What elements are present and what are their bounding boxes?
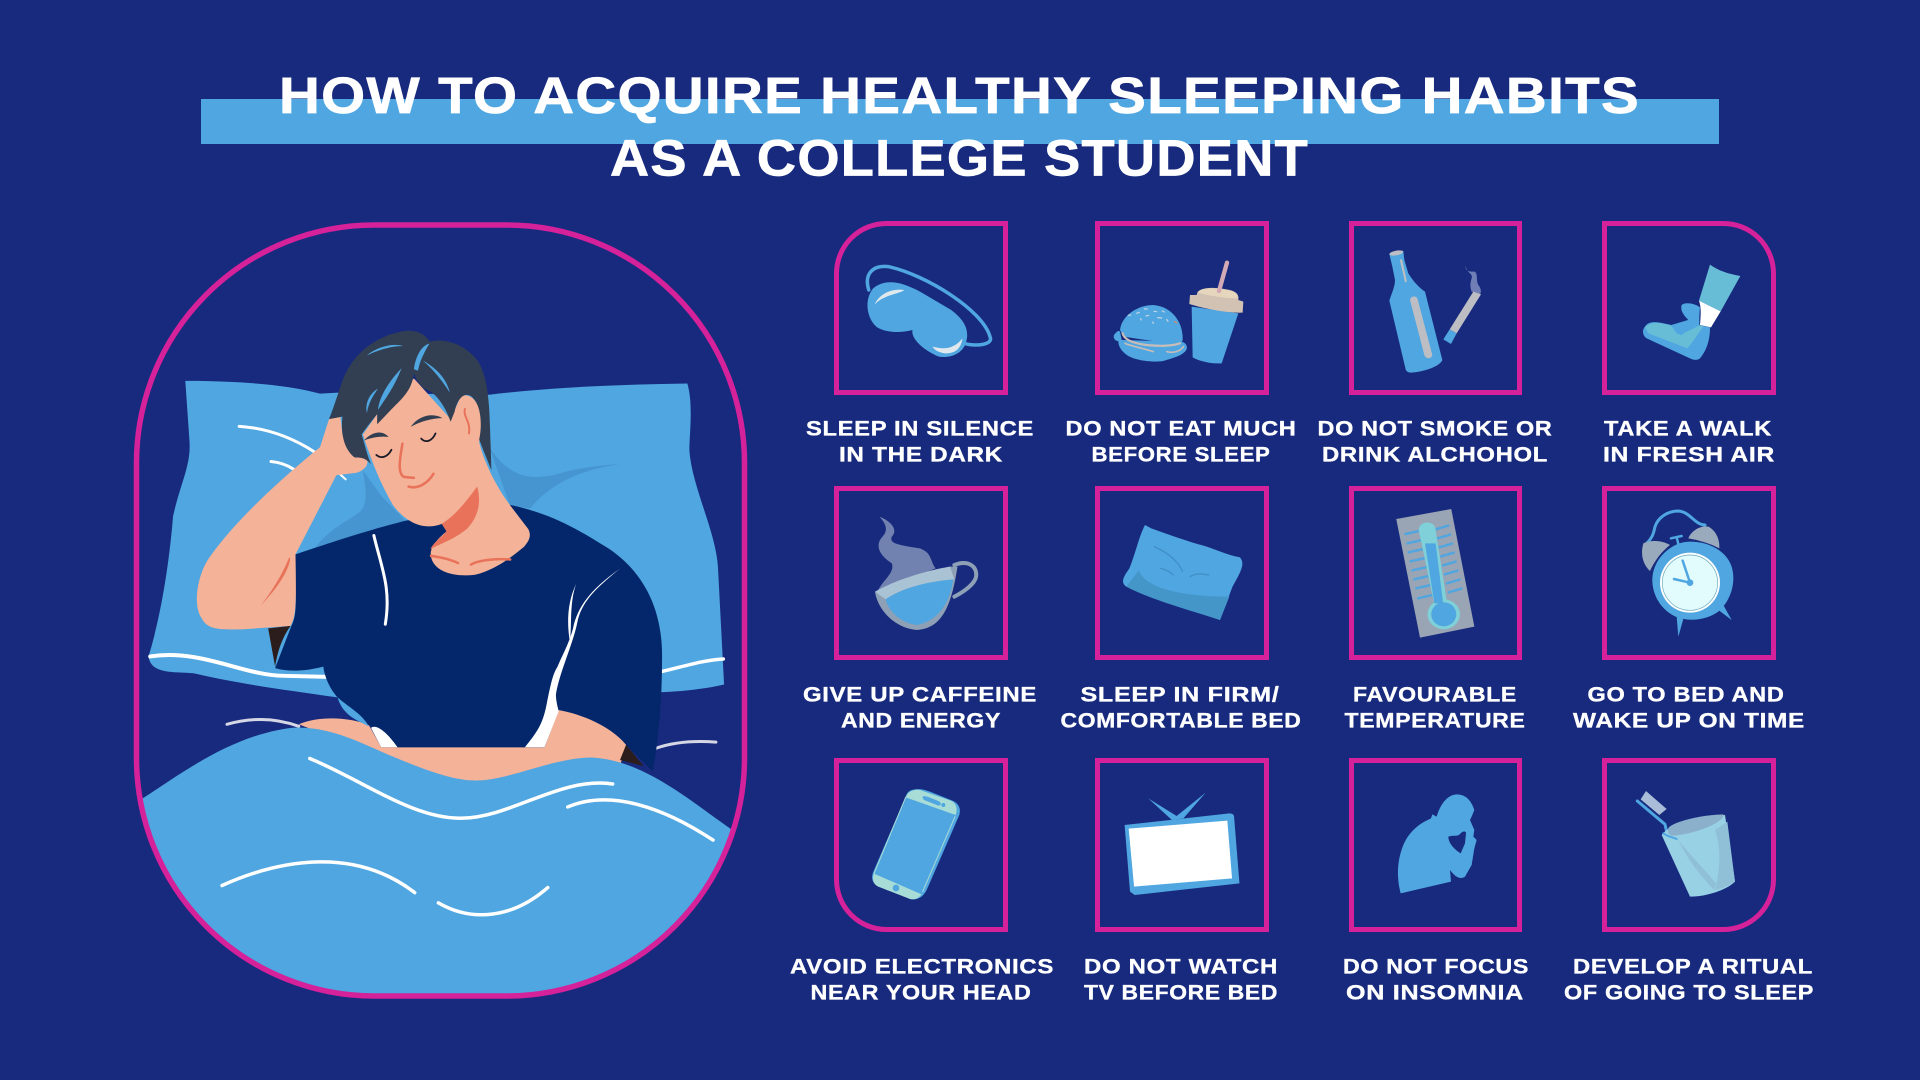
icon: steaming cup (875, 517, 976, 630)
label: TAKE A WALK (1604, 418, 1772, 440)
tip: do not watch tv: TV BEFORE BED (1084, 982, 1278, 1004)
tip: take a walk: IN FRESH AIR (1603, 444, 1775, 466)
head and neck (363, 378, 530, 575)
title line two: AS A COLLEGE STUDENT (610, 130, 1309, 186)
tip: avoid electronics: NEAR YOUR HEAD (810, 982, 1032, 1004)
label: SLEEP IN FIRM/ (1080, 684, 1280, 706)
bed sheet lines (227, 720, 716, 748)
icon: walking shoe (1643, 265, 1740, 360)
tip: develop a ritual (1564, 760, 1814, 1004)
icon: television (1125, 793, 1239, 895)
tip: do not focus on insomnia (1343, 760, 1529, 1004)
illustration panel: sleeping student (120, 225, 760, 1010)
illustration frame (136, 225, 744, 996)
box (836, 760, 1006, 930)
box (1604, 488, 1774, 658)
box (1352, 488, 1520, 658)
pillow (149, 381, 724, 697)
label: FAVOURABLE (1353, 684, 1517, 706)
tip: give up caffeine (803, 488, 1037, 732)
icon: thermometer (1396, 509, 1474, 638)
label: SLEEP IN SILENCE (806, 418, 1034, 440)
label: DO NOT EAT MUCH (1066, 418, 1296, 440)
icon: sleep mask (867, 266, 991, 357)
box (1098, 488, 1266, 658)
icon: burger and drink (1114, 263, 1243, 363)
label: GIVE UP CAFFEINE (803, 684, 1037, 706)
label: DO NOT WATCH (1084, 956, 1278, 978)
label: DO NOT FOCUS (1343, 956, 1529, 978)
tip: avoid electronics (790, 760, 1054, 1004)
tip: take a walk (1603, 224, 1775, 466)
tip: do not smoke or drink (1318, 224, 1552, 466)
label: DO NOT SMOKE OR (1318, 418, 1552, 440)
shirt (268, 505, 662, 771)
tip: go to bed on time: WAKE UP ON TIME (1573, 710, 1805, 732)
tip: do not eat much (1066, 224, 1296, 466)
hair (329, 331, 491, 470)
lower arms (299, 710, 626, 787)
box (1098, 760, 1266, 930)
box (1098, 224, 1266, 392)
tip: do not watch tv (1084, 760, 1278, 1004)
raised arm (197, 417, 367, 629)
box (836, 224, 1006, 392)
icon: worried person silhouette (1398, 794, 1477, 893)
blanket (142, 728, 731, 994)
icon: alarm clock (1642, 511, 1733, 637)
box (1604, 224, 1774, 392)
icon: bottle and cigarette (1389, 249, 1481, 373)
title line one: HOW TO ACQUIRE HEALTHY SLEEPING HABITS (279, 67, 1640, 124)
title banner (201, 67, 1719, 186)
icon: smartphone (872, 789, 960, 899)
tip: sleep in silence: IN THE DARK (839, 444, 1003, 466)
icon: toothbrush in cup (1637, 791, 1735, 897)
label: AVOID ELECTRONICS (790, 956, 1054, 978)
tip: favourable temperature: TEMPERATURE (1344, 710, 1526, 732)
label: GO TO BED AND (1588, 684, 1784, 706)
tip: develop a ritual: OF GOING TO SLEEP (1564, 982, 1814, 1004)
tip: do not focus on insomnia: ON INSOMNIA (1346, 982, 1524, 1004)
box (1352, 224, 1520, 392)
title bar (201, 99, 1719, 144)
tip: favourable temperature (1344, 488, 1526, 732)
box (1604, 760, 1774, 930)
tip: go to bed on time (1573, 488, 1805, 732)
tip: firm comfortable bed: COMFORTABLE BED (1060, 710, 1302, 732)
tip: give up caffeine: AND ENERGY (841, 710, 1001, 732)
box (1352, 760, 1520, 930)
infographic canvas (134, 76, 1813, 1000)
tip: sleep in silence (806, 224, 1034, 466)
tip: do not smoke or drink: DRINK ALCHOHOL (1322, 444, 1548, 466)
box (836, 488, 1006, 658)
tip: do not eat much: BEFORE SLEEP (1092, 444, 1270, 466)
icon: pillow (1123, 525, 1242, 620)
label: DEVELOP A RITUAL (1573, 956, 1813, 978)
tip: firm comfortable bed (1060, 488, 1302, 732)
